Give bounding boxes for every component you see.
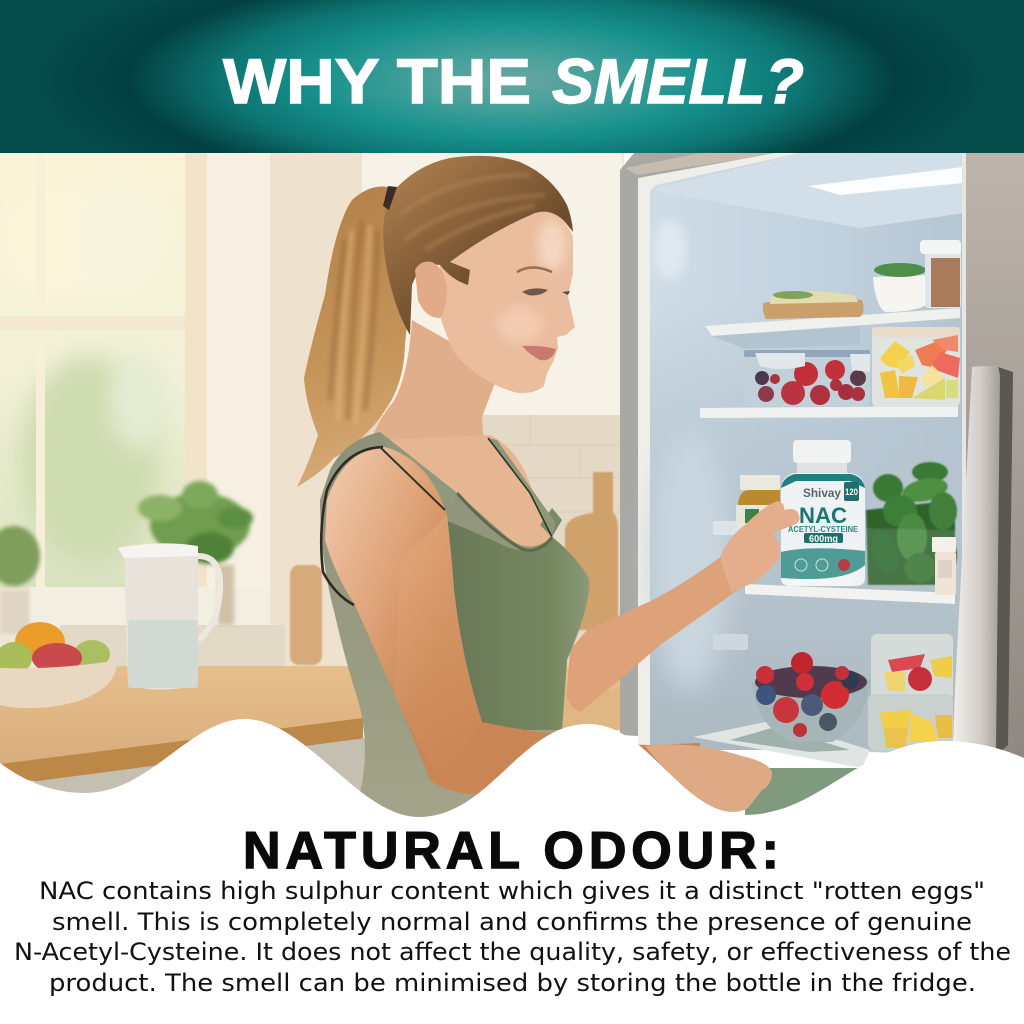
glass jug [118,543,220,690]
ceiling [650,153,965,228]
mango and melon box [872,327,960,407]
title: SMELL? [552,47,804,117]
section heading: NATURAL ODOUR: [243,822,779,880]
door handle [953,366,1013,752]
fruit boxes bottom [868,634,953,750]
small bottle [932,537,956,595]
potted plant on windowsill [138,481,253,625]
body text: NAC contains high sulphur content which gives it a distinct "rotten eggs" [39,877,985,905]
title: WHY THE [223,47,531,117]
body text: smell. This is completely normal and confirms the presence of genuine [52,908,972,936]
top shelf food [763,240,961,319]
supplement bottle: 600mg [809,534,838,545]
woman [297,156,772,825]
chest and far shoulder [380,435,552,548]
hand holding bottle [720,501,800,592]
hair top [383,156,573,335]
crisper drawer [745,768,862,818]
spinach [866,462,957,586]
window [0,153,270,627]
ponytail [297,186,412,487]
open fridge [620,153,1024,818]
white wave panel [0,719,1024,1024]
kitchen background [0,153,624,810]
fridge frame [620,153,965,755]
far arm [567,556,745,712]
bowl of berries [752,652,870,742]
fridge door edge [965,153,1024,760]
neck [368,320,500,447]
windowsill [60,625,285,667]
supplement bottle: NAC [799,503,847,528]
supplement bottle: 120 [845,487,858,497]
left potted herb [0,526,40,634]
supplement bottle [781,440,865,586]
countertop [0,666,622,810]
amber jar [736,475,780,530]
tile backsplash [362,415,622,670]
pepper mill [290,565,322,665]
body text: product. The smell can be minimised by storing the bottle in the fridge. [49,969,976,997]
supplement bottle: ACETYL-CYSTEINE [788,525,859,534]
header banner [0,0,1024,153]
lower hand [645,744,772,812]
tank top torso [320,432,590,825]
shelves [693,308,960,768]
body text: N-Acetyl-Cysteine. It does not affect the quality, safety, or effectiveness of the [14,938,1011,966]
cutting board [565,472,618,630]
face [440,208,575,393]
fruit bowl [0,622,117,708]
berry box [744,350,870,406]
near arm [321,447,700,800]
title [223,47,804,117]
hair band [383,186,397,210]
body text [14,877,1011,997]
brand label: Shivay [803,486,841,500]
eye and mouth [517,268,570,360]
ear [415,262,447,318]
upper cabinet [362,153,622,415]
